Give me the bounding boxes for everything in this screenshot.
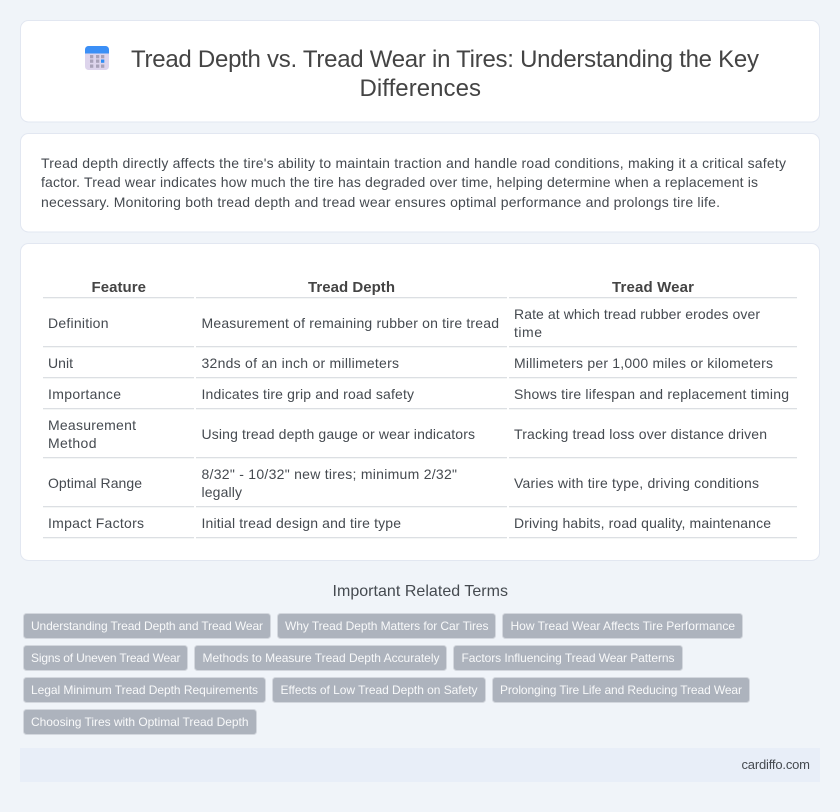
row: measurement method: Method	[48, 435, 96, 451]
chip	[24, 646, 188, 670]
chip: Understanding Tread Depth and Tread Wear	[31, 619, 263, 633]
row: optimal range: Optimal Range	[48, 475, 142, 491]
row: unit: Millimeters per 1,000 miles or kilometers	[514, 355, 773, 371]
panel: intro text: Tread depth directly affects the tire's ability to maintain traction and handle road conditions, making it a critical safety	[41, 155, 786, 171]
chip	[24, 614, 270, 638]
row: impact factors: Initial tread design and tire type	[202, 515, 401, 531]
row: definition: Definition	[48, 315, 108, 331]
row: impact factors: Impact Factors	[48, 515, 144, 531]
panel: header	[20, 20, 820, 122]
table header: Tread Depth	[308, 279, 395, 296]
table header: Tread Wear	[612, 279, 694, 296]
row: definition: time	[514, 324, 542, 340]
chip	[492, 678, 750, 702]
row: definition: Measurement of remaining rubber on tire tread	[202, 315, 499, 331]
panel: intro text: necessary. Monitoring both tread depth and tread wear ensures optimal performance and prolongs tire life.	[41, 194, 720, 210]
title	[131, 46, 759, 102]
row: importance: Shows tire lifespan and replacement timing	[514, 386, 789, 402]
row: optimal range	[43, 466, 797, 507]
chip: Methods to Measure Tread Depth Accurately	[202, 651, 440, 665]
panel: intro text: factor. Tread wear indicates how much the tire has degraded over time, helping determine when a replacement is	[41, 174, 758, 190]
chip: How Tread Wear Affects Tire Performance	[510, 619, 735, 633]
chip: Effects of Low Tread Depth on Safety	[280, 683, 478, 697]
row: definition	[43, 306, 797, 347]
footer: cardiffo.com	[742, 757, 810, 772]
chip	[194, 646, 446, 670]
heading: related terms: Important Related Terms	[332, 583, 508, 600]
footer	[20, 748, 820, 782]
row: measurement method: Tracking tread loss over distance driven	[514, 426, 767, 442]
row: measurement method: Using tread depth gauge or wear indicators	[202, 426, 475, 442]
title: Tread Depth vs. Tread Wear in Tires: Understanding the Key	[131, 46, 759, 73]
chip	[272, 678, 486, 702]
panel: intro text	[20, 134, 820, 232]
row: unit: Unit	[48, 355, 73, 371]
row: unit: 32nds of an inch or millimeters	[202, 355, 399, 371]
row: impact factors	[43, 515, 797, 538]
panel: related term chips	[24, 614, 750, 734]
row: unit	[43, 355, 797, 378]
chip: Why Tread Depth Matters for Car Tires	[285, 619, 488, 633]
chip: Signs of Uneven Tread Wear	[31, 651, 180, 665]
row: impact factors: Driving habits, road quality, maintenance	[514, 515, 771, 531]
chip	[454, 646, 682, 670]
chip: Prolonging Tire Life and Reducing Tread Wear	[500, 683, 742, 697]
row: importance: Indicates tire grip and road safety	[202, 386, 414, 402]
row: importance: Importance	[48, 386, 121, 402]
chip	[278, 614, 496, 638]
row: measurement method: Measurement	[48, 417, 136, 433]
table header: Feature	[92, 279, 146, 296]
icon: calendar	[85, 46, 109, 70]
chip: Factors Influencing Tread Wear Patterns	[462, 651, 674, 665]
chip: Legal Minimum Tread Depth Requirements	[31, 683, 258, 697]
chip: Choosing Tires with Optimal Tread Depth	[31, 715, 248, 729]
title: Differences	[360, 75, 481, 102]
row: measurement method	[43, 417, 797, 458]
row: importance	[43, 386, 797, 409]
chip	[502, 614, 742, 638]
table header	[43, 279, 797, 298]
row: optimal range: legally	[202, 484, 242, 500]
chip	[24, 678, 266, 702]
row: optimal range: 8/32" - 10/32" new tires; minimum 2/32"	[202, 466, 457, 482]
row: definition: Rate at which tread rubber erodes over	[514, 306, 760, 322]
chip	[24, 710, 256, 734]
row: optimal range: Varies with tire type, driving conditions	[514, 475, 759, 491]
panel: comparison table	[20, 244, 820, 560]
